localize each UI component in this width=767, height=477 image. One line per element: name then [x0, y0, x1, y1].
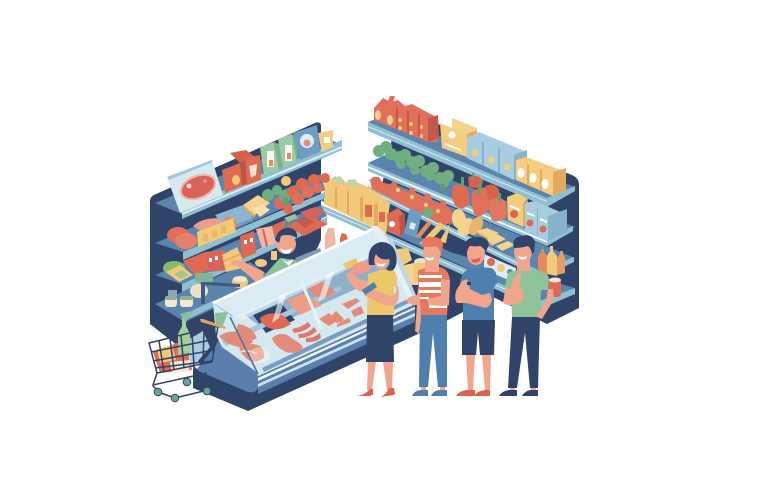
person: woman in yellow	[343, 242, 399, 397]
yellow scoop and jar	[271, 251, 277, 260]
bottom-left grocery stack	[183, 247, 242, 275]
shoes	[456, 390, 475, 396]
crossed arms	[455, 279, 492, 308]
glass interior	[232, 240, 416, 376]
fourth left shelf	[155, 262, 275, 322]
shirt	[418, 267, 450, 315]
cart wheels	[154, 388, 162, 396]
yellow small box	[318, 130, 333, 152]
skirt	[366, 315, 394, 362]
shirt	[460, 267, 497, 320]
red packs and boxes	[240, 207, 328, 259]
left arm	[503, 273, 524, 305]
clerk head	[276, 234, 296, 254]
counter front band	[258, 305, 415, 394]
cheese wheel on lowest shelf	[190, 284, 208, 298]
top right shelf	[368, 115, 575, 207]
clerk body	[262, 258, 305, 283]
meat on third shelf	[167, 218, 226, 249]
blue bottles behind clerk	[295, 248, 322, 265]
side glass	[213, 303, 258, 373]
middle right shelf	[368, 155, 575, 246]
cart handle	[200, 319, 226, 329]
yellow cartons on top shelf	[516, 157, 566, 196]
pants	[419, 315, 447, 387]
glass frame	[230, 317, 258, 374]
red peppers	[452, 173, 507, 221]
head	[425, 258, 439, 272]
arm right	[364, 284, 399, 306]
green boxes top-left	[260, 134, 298, 175]
blue boxes on top shelf	[467, 132, 527, 180]
shoes	[499, 390, 517, 396]
head	[467, 243, 485, 265]
yellow sauce box	[507, 193, 528, 227]
yellow goods behind glass	[395, 248, 428, 285]
red snack box	[387, 208, 405, 236]
top left shelf	[155, 135, 342, 219]
clerk arm	[234, 260, 264, 282]
ankles	[421, 386, 426, 391]
right arm	[537, 289, 554, 319]
shirt	[367, 269, 397, 315]
person: man in blue shirt	[455, 237, 497, 396]
carrots and baguettes	[415, 221, 450, 244]
yellow boxes on top shelf	[440, 118, 477, 157]
counter shelves	[222, 286, 342, 346]
red packs top-left	[222, 150, 261, 193]
counter left end	[196, 317, 258, 392]
fourth right shelf	[317, 196, 575, 309]
second left shelf	[155, 174, 325, 260]
red cartons on top shelf	[374, 96, 439, 142]
legs	[466, 355, 475, 390]
panel: left shelving unit	[150, 122, 342, 400]
blue fish pack	[215, 205, 253, 231]
icon: shopping cart	[149, 310, 228, 402]
bread loaves	[450, 208, 486, 239]
clerk behind counter	[231, 228, 348, 288]
blue cereal box top-left	[293, 125, 320, 160]
shirt	[505, 269, 549, 317]
hand and card	[346, 272, 368, 293]
shorts	[462, 320, 495, 355]
third left shelf	[155, 205, 327, 292]
dark tray	[253, 303, 295, 333]
jars	[165, 290, 193, 307]
scale on stand	[195, 273, 240, 310]
cheese wedges	[243, 195, 270, 218]
tomatoes and greens	[262, 173, 330, 214]
head	[373, 247, 389, 269]
meat sign	[167, 160, 223, 213]
blue boxes on middle shelf	[525, 201, 567, 241]
head	[517, 258, 530, 271]
panel: meat display counter	[193, 226, 418, 411]
person: man in striped shirt	[406, 237, 450, 396]
meat cuts	[219, 282, 364, 362]
greens and cheese	[163, 261, 193, 282]
person: man in green shirt	[499, 235, 554, 396]
panel: right shelving unit	[317, 96, 579, 340]
arms	[427, 279, 450, 306]
cheese blocks	[476, 228, 515, 251]
cereal boxes	[484, 254, 516, 283]
egg carton	[197, 218, 236, 247]
broccoli row	[373, 141, 454, 191]
blue bag	[404, 208, 433, 238]
shoes	[357, 389, 373, 396]
ankles	[510, 386, 515, 391]
legs	[367, 362, 376, 390]
glass panels	[232, 240, 392, 320]
glass top	[212, 226, 391, 317]
pants	[508, 317, 540, 388]
canned meat lower right	[549, 278, 561, 297]
meat in hand	[349, 259, 373, 277]
cart basket	[149, 326, 218, 398]
shoes	[412, 390, 428, 396]
cart contents	[153, 340, 192, 373]
yellow cartons on fourth shelf	[324, 176, 390, 235]
plant leaves behind cart	[180, 310, 195, 322]
third right shelf	[368, 180, 575, 278]
bottles bottom-right	[538, 246, 565, 276]
bottle top right	[325, 228, 336, 252]
counter base	[193, 320, 405, 411]
red bottles on third shelf	[370, 177, 452, 225]
